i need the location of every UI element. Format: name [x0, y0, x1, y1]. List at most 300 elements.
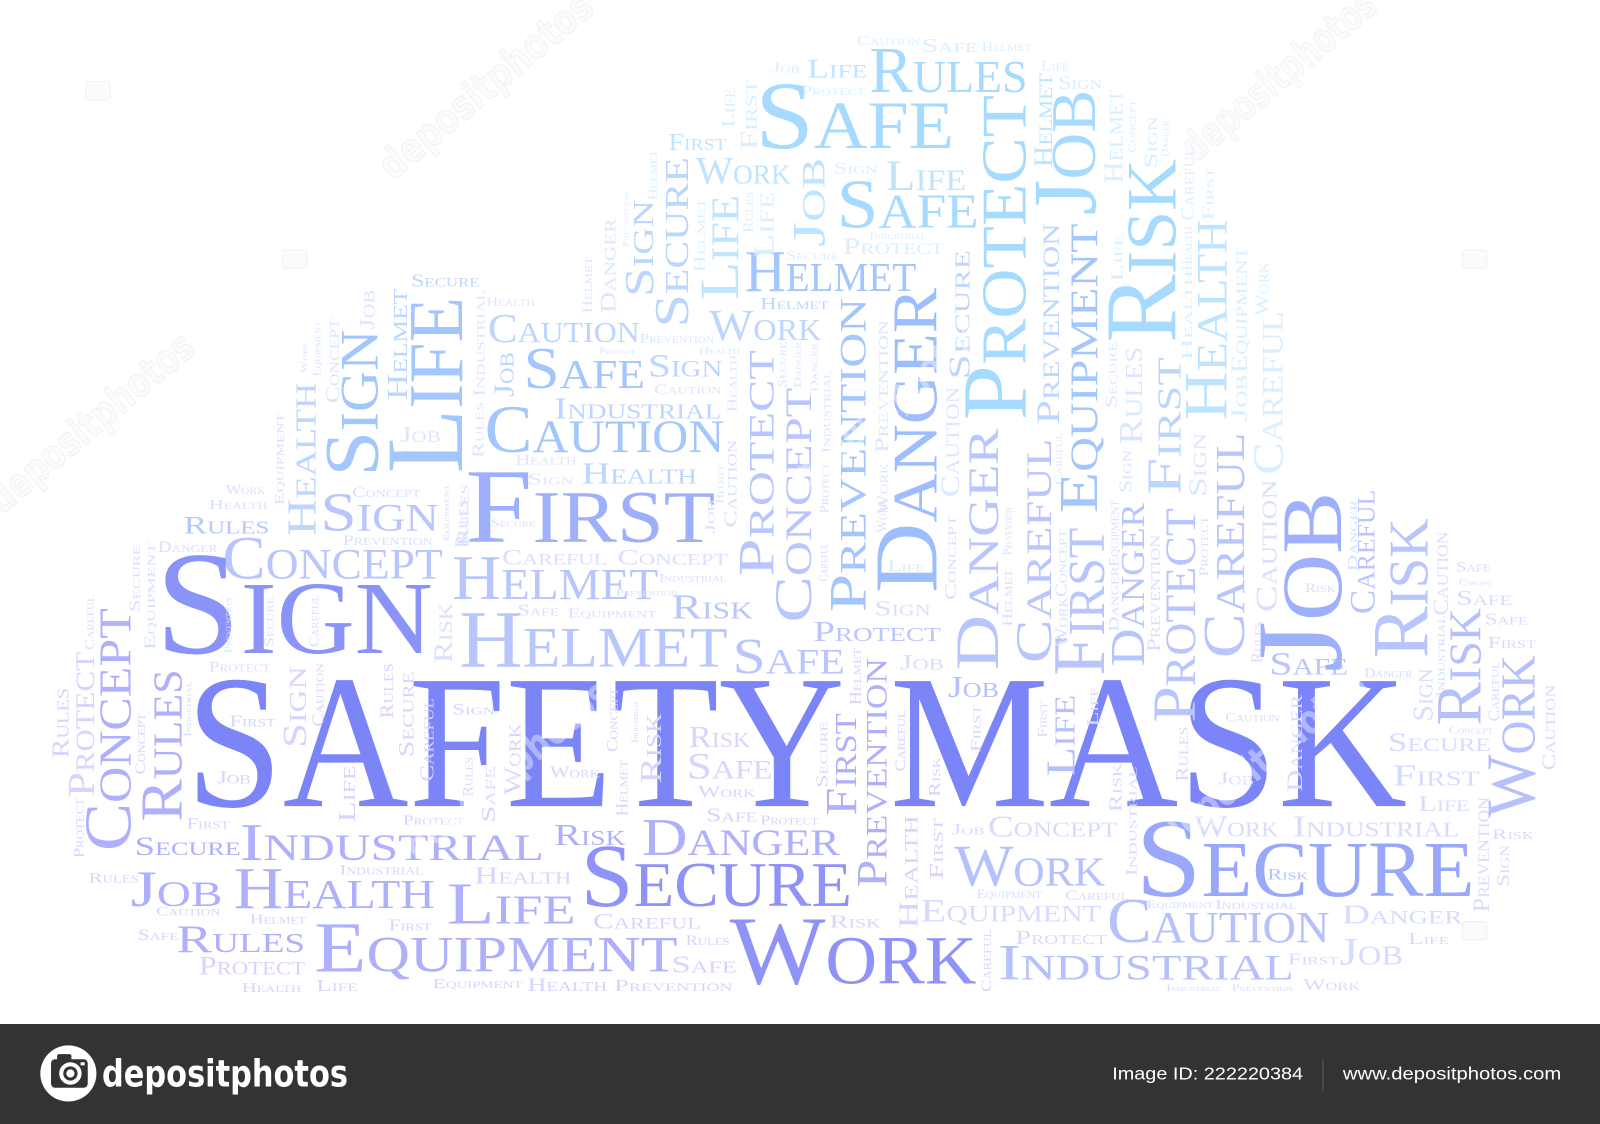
vertical keywords: left side: Job [702, 500, 717, 534]
bottom horizontal keywords: First [187, 816, 230, 833]
vertical keywords: left side: Concept [322, 318, 344, 403]
lower middle horizontal keywords: Safe [1485, 610, 1528, 629]
logo wordmark: depositphotos [102, 1052, 348, 1096]
bottom horizontal keywords: Health [242, 980, 302, 995]
top lobe horizontal keywords: Helmet [745, 238, 916, 304]
vertical keywords: lower right: Careful [1486, 661, 1503, 721]
vertical keywords: left side: Caution [308, 663, 327, 727]
bottom right horizontal keywords: First [1393, 759, 1480, 793]
bottom right horizontal keywords: Risk [1267, 867, 1308, 884]
lower middle horizontal keywords: Safe [1456, 586, 1512, 610]
vertical keywords: left side: Rules [460, 757, 476, 797]
upper middle horizontal keywords: Health [515, 452, 577, 468]
bottom horizontal keywords: Risk [830, 912, 882, 932]
vertical keywords: upper right: Health [1173, 219, 1241, 420]
bottom horizontal keywords: Caution [156, 904, 221, 918]
vertical keywords: upper centre: Danger [793, 341, 804, 388]
lower middle horizontal keywords [155, 522, 1537, 789]
vertical keywords: upper centre: Rules [741, 192, 757, 233]
vertical keywords: lower right: Prevention [1000, 507, 1015, 555]
vertical keywords: lower right: First [1035, 701, 1050, 738]
vertical keywords: lower right: Work [1051, 596, 1071, 647]
vertical keywords: upper centre: Danger [858, 288, 957, 593]
vertical keywords: upper centre: Life [749, 192, 780, 258]
bottom right horizontal keywords: Work [1303, 975, 1361, 994]
vertical keywords: left side: Helmet [613, 760, 632, 816]
bottom horizontal keywords: Prevention [614, 976, 733, 995]
bottom right horizontal keywords: Work [1194, 810, 1279, 844]
top lobe horizontal keywords: Caution [857, 33, 921, 48]
bottom right horizontal keywords: Protect [1015, 927, 1108, 949]
vertical keywords: upper centre: Protect [818, 463, 832, 513]
vertical keywords: left side: Industrial [630, 700, 640, 743]
vertical keywords: upper right: Risk [1086, 159, 1199, 343]
vertical keywords: upper centre: Job [354, 290, 379, 330]
bottom horizontal keywords: Danger [642, 809, 840, 867]
vertical keywords: upper centre: Protect [729, 350, 785, 577]
bottom right horizontal keywords: Industrial [998, 936, 1294, 992]
vertical keywords: upper centre [309, 79, 1046, 622]
vertical keywords: upper right: Equipment [1048, 223, 1109, 513]
lower middle horizontal keywords: Safe [1269, 646, 1348, 682]
vertical keywords: lower right: Careful [893, 710, 909, 771]
vertical keywords: lower right: Industrial [1124, 766, 1141, 877]
upper middle horizontal keywords: Caution [488, 306, 640, 351]
vertical keywords: upper right: Sign [1183, 433, 1212, 497]
lower middle horizontal keywords: Concept [617, 544, 728, 569]
vertical keywords: upper right: Health [1179, 226, 1196, 270]
vertical keywords: left side: Equipment [312, 321, 323, 377]
vertical keywords: upper right: Job [1227, 374, 1253, 421]
top lobe horizontal keywords: Sign [1058, 73, 1102, 94]
top lobe horizontal keywords: Protect [801, 83, 866, 98]
vertical keywords: lower right: Danger [1282, 694, 1307, 792]
bottom horizontal keywords: Health [528, 975, 607, 996]
vertical keywords: left side: Rules [129, 669, 195, 821]
upper middle horizontal keywords: Danger [158, 539, 218, 556]
upper middle horizontal keywords: Health [487, 295, 535, 309]
vertical keywords: left side: Careful [417, 698, 439, 782]
upper middle horizontal keywords: Health [209, 497, 268, 512]
icon: depositphotos camera logo [40, 1045, 96, 1102]
vertical keywords: lower right [813, 433, 1560, 992]
upper middle horizontal keywords: Rules [184, 511, 269, 540]
upper middle horizontal keywords: Prevention [343, 533, 433, 549]
vertical keywords: upper right: Careful [1178, 147, 1199, 220]
vertical keywords: left side: Work [299, 341, 309, 373]
vertical keywords: left side: Industrial [183, 681, 193, 737]
vertical keywords: left side: Protect [72, 798, 88, 858]
top lobe horizontal keywords: Helmet [982, 40, 1032, 54]
vertical keywords: lower right: Danger [1100, 503, 1155, 666]
vertical keywords: lower right: Life [1083, 686, 1102, 727]
bottom right horizontal keywords: Risk [1492, 827, 1535, 843]
vertical keywords: upper centre: Life [689, 195, 750, 300]
top lobe horizontal keywords: Secure [786, 248, 839, 263]
lower middle horizontal keywords: Careful [502, 544, 607, 569]
vertical keywords: upper right: Life [1107, 234, 1126, 282]
lower middle horizontal keywords: First [1488, 633, 1537, 652]
vertical keywords: upper centre: Danger [809, 342, 820, 392]
bottom right horizontal keywords: Job [952, 822, 985, 839]
top lobe horizontal keywords: Safe [837, 167, 979, 244]
bottom horizontal keywords: Work [698, 782, 756, 801]
vertical keywords: lower right: Caution [1250, 480, 1284, 612]
vertical keywords: upper centre: Industrial [820, 370, 834, 453]
vertical keywords: left side: Risk [428, 603, 458, 663]
watermark overlays across the words: depositphotos [394, 669, 620, 870]
lower middle horizontal keywords: Protect [813, 617, 941, 648]
vertical keywords: upper centre: Protect [944, 95, 1046, 420]
vertical keywords: left side: Equipment [142, 542, 159, 650]
vertical keywords: lower right: Risk [1358, 518, 1446, 658]
bottom horizontal keywords: First [230, 712, 276, 731]
lower middle horizontal keywords: Concept [1459, 578, 1492, 588]
bottom right horizontal keywords: Industrial [1166, 983, 1222, 993]
top lobe horizontal keywords: Safe [921, 35, 978, 57]
vertical keywords: upper right: Helmet [1097, 89, 1128, 184]
vertical keywords: left side: Concept [133, 713, 149, 774]
bottom horizontal keywords: Job [217, 768, 251, 788]
title: SAFETY MASK: SAFETY [186, 637, 845, 848]
vertical keywords: left side: Work [499, 723, 526, 795]
upper middle horizontal keywords: Sign [528, 470, 574, 489]
vertical keywords: upper right: Equipment [1227, 247, 1253, 373]
vertical keywords: lower right: Job [1233, 492, 1368, 672]
vertical keywords: upper centre: Job [489, 352, 520, 397]
vertical keywords: lower right: Life [1038, 695, 1083, 777]
lower middle horizontal keywords: Sign [155, 522, 433, 686]
title: SAFETY MASK [186, 637, 1407, 848]
bottom horizontal keywords: Risk [689, 720, 750, 754]
lower middle horizontal keywords: Life [888, 556, 925, 575]
bottom right horizontal keywords: Equipment [1147, 899, 1213, 911]
vertical keywords: upper right [944, 73, 1293, 670]
lower middle horizontal keywords: Concept [222, 525, 443, 593]
vertical keywords: left side: Health [725, 354, 740, 412]
vertical keywords: upper centre: Helmet [692, 198, 709, 272]
vertical keywords: lower right: Protect [1141, 508, 1209, 722]
bottom right horizontal keywords: Secure [1388, 727, 1491, 757]
bottom right horizontal keywords: Equipment [977, 887, 1042, 901]
vertical keywords: upper right: First [1198, 167, 1217, 220]
upper middle horizontal keywords: Concept [352, 485, 420, 501]
bottom right horizontal keywords: Life [1418, 791, 1469, 816]
bottom horizontal keywords: First [389, 916, 432, 935]
bottom right horizontal keywords: Danger [1342, 898, 1463, 929]
bottom horizontal keywords: Life [316, 976, 358, 995]
top lobe horizontal keywords [668, 33, 1102, 304]
vertical keywords: lower right: Secure [813, 721, 832, 788]
top lobe horizontal keywords: Safe [755, 62, 954, 169]
top lobe horizontal keywords: Industrial [869, 231, 927, 242]
bottom horizontal keywords: Protect [760, 813, 819, 828]
bottom horizontal keywords [89, 701, 977, 1006]
lower middle horizontal keywords: Industrial [659, 573, 727, 585]
upper middle horizontal keywords [158, 271, 829, 565]
vertical keywords: upper right: First [1137, 357, 1192, 495]
vertical keywords: left side: Sign [277, 666, 314, 748]
vertical keywords: upper right: Careful [1246, 311, 1293, 474]
vertical keywords: upper right: Danger [944, 428, 1012, 670]
lower middle horizontal keywords: Risk [1305, 581, 1336, 595]
lower middle horizontal keywords: Helmet [459, 593, 728, 684]
bottom horizontal keywords: Rules [177, 918, 305, 961]
vertical keywords: left side: Equipment [273, 412, 287, 505]
bottom right horizontal keywords: Secure [1136, 797, 1474, 921]
bottom horizontal keywords: Secure [581, 827, 852, 926]
faint background watermarks [0, 0, 1487, 940]
vertical keywords: left side: Rules [377, 663, 398, 718]
upper middle horizontal keywords: First [465, 447, 715, 565]
bottom right horizontal keywords: Caution [1107, 886, 1330, 956]
lower middle horizontal keywords: Sign [874, 595, 931, 620]
vertical keywords: upper right: Careful [1053, 433, 1065, 485]
bottom right horizontal keywords: Equipment [920, 893, 1101, 929]
vertical keywords: left side: Safe [478, 766, 500, 822]
vertical keywords: upper centre: Sign [617, 200, 662, 297]
lower middle horizontal keywords: Prevention [616, 588, 678, 599]
bottom horizontal keywords: Equipment [433, 976, 523, 991]
vertical keywords: upper right: Careful [1007, 439, 1063, 663]
vertical keywords: upper right: Work [1251, 262, 1273, 315]
top lobe horizontal keywords: First [668, 129, 727, 156]
vertical keywords: left side: Secure [127, 545, 144, 612]
vertical keywords: upper centre: Caution [935, 386, 965, 497]
bottom horizontal keywords: Helmet [250, 911, 307, 926]
upper middle horizontal keywords: Caution [485, 392, 724, 467]
vertical keywords: lower right: First [969, 705, 985, 752]
vertical keywords: lower right: Danger [1106, 566, 1122, 632]
vertical keywords: left side: Rules [451, 500, 471, 548]
top lobe horizontal keywords: Job [772, 59, 800, 76]
bottom horizontal keywords: Health [474, 863, 571, 890]
top lobe horizontal keywords: Rules [869, 35, 1028, 107]
vertical keywords: upper centre: Life [719, 88, 740, 128]
vertical keywords: upper right: Sign [1116, 449, 1136, 493]
bottom horizontal keywords: Work [550, 763, 600, 782]
vertical keywords: lower right: Prevention [850, 658, 897, 888]
bottom horizontal keywords: Secure [135, 831, 241, 861]
vertical keywords: left side [47, 318, 741, 858]
bottom horizontal keywords: Careful [593, 909, 701, 934]
upper middle horizontal keywords: Safe [523, 335, 645, 401]
lower middle horizontal keywords: Caution [1226, 710, 1280, 724]
bottom horizontal keywords: Job [131, 862, 222, 918]
vertical keywords: left side: Risk [634, 713, 668, 784]
vertical keywords: lower right: Risk [1424, 608, 1495, 726]
vertical keywords: left side: Secure [393, 671, 418, 757]
upper middle horizontal keywords: Sign [320, 482, 439, 543]
vertical keywords: upper centre: Concept [765, 388, 823, 622]
top lobe horizontal keywords: Work [696, 150, 791, 193]
vertical keywords: upper centre: Helmet [580, 257, 596, 313]
vertical keywords: left side: Careful [306, 595, 321, 647]
lower middle horizontal keywords: Risk [671, 587, 754, 626]
vertical keywords: upper centre: Rules [469, 402, 488, 458]
vertical keywords: left side: Concept [604, 687, 621, 752]
bottom right horizontal keywords: Work [954, 833, 1106, 899]
upper middle horizontal keywords: Prevention [640, 331, 715, 346]
vertical keywords: upper centre: Secure [776, 341, 790, 388]
bottom right horizontal keywords: Job [1340, 930, 1403, 973]
vertical keywords: left side: Rules [453, 485, 472, 546]
vertical keywords: lower right: Industrial [1434, 615, 1448, 697]
lower middle horizontal keywords: Safe [517, 600, 560, 619]
vertical keywords: lower right: Sign [1493, 844, 1513, 887]
bottom horizontal keywords: Industrial [340, 863, 423, 879]
vertical keywords: left side: Helmet [715, 464, 726, 503]
vertical keywords: upper centre: Prevention [622, 191, 631, 247]
vertical keywords: lower right: Health [892, 815, 923, 929]
bottom horizontal keywords: Safe [138, 927, 179, 944]
vertical keywords: lower right: Risk [1105, 762, 1125, 812]
bottom right horizontal keywords: Prevention [1232, 983, 1294, 993]
image ID: Image ID: 222220384 [1112, 1064, 1303, 1084]
bottom right horizontal keywords: Careful [1065, 888, 1129, 904]
vertical keywords: lower right: Risk [925, 757, 944, 797]
bottom horizontal keywords: Equipment [314, 906, 678, 987]
upper middle horizontal keywords: Protect [599, 346, 635, 356]
vertical keywords: lower right: Danger [1345, 500, 1360, 571]
vertical keywords: lower right: Helmet [1000, 569, 1016, 627]
bottom horizontal keywords: Safe [706, 804, 757, 826]
lower middle horizontal keywords: Helmet [452, 543, 658, 613]
footer bar [0, 1024, 1600, 1124]
upper middle horizontal keywords: Health [582, 457, 697, 491]
vertical keywords: upper right: Rules [1113, 347, 1150, 445]
top lobe horizontal keywords: Protect [843, 234, 944, 260]
vertical keywords: lower right: Work [1474, 655, 1551, 817]
vertical keywords: upper right: Danger [1160, 120, 1171, 157]
vertical keywords: left side: Caution [721, 439, 741, 528]
vertical keywords: upper centre: Prevention [872, 320, 893, 453]
vertical keywords: left side: Life [334, 765, 361, 822]
vertical keywords: lower right: First [816, 713, 866, 815]
watermark overlays across the words: depositphotos [1149, 659, 1375, 860]
vertical keywords: lower right: Sign [1409, 668, 1440, 721]
vertical keywords: lower right: Careful [1342, 490, 1382, 614]
vertical keywords: upper centre: Helmet [383, 289, 414, 400]
lower middle horizontal keywords: Job [900, 649, 944, 674]
lower middle horizontal keywords: Danger [1364, 666, 1412, 681]
bottom horizontal keywords: Safe [671, 951, 737, 978]
vertical keywords: lower right: First [926, 818, 948, 880]
upper middle horizontal keywords: Health [699, 346, 740, 357]
vertical keywords: lower right: Prevention [1469, 796, 1495, 912]
vertical keywords: upper right: Sign [1141, 116, 1162, 168]
bottom horizontal keywords: Sign [452, 701, 495, 718]
vertical keywords: upper right: Helmet [1028, 73, 1058, 167]
top lobe horizontal keywords: Life [1041, 58, 1069, 74]
vertical keywords: lower right: Equipment [1106, 500, 1122, 566]
upper middle horizontal keywords: Sign [648, 349, 723, 385]
lower middle horizontal keywords: Job [1218, 769, 1255, 789]
vertical keywords: lower right: Careful [1191, 433, 1257, 658]
vertical keywords: upper centre: Industrial [470, 290, 489, 397]
vertical keywords: upper centre: First [736, 79, 763, 150]
upper middle horizontal keywords: Industrial [554, 391, 721, 425]
vertical keywords: upper right: Concept [1127, 100, 1139, 153]
vertical keywords: lower right: Caution [1539, 685, 1560, 770]
vertical keywords: upper centre: Concept [941, 514, 960, 600]
bottom right horizontal keywords: Concept [988, 810, 1118, 844]
bottom right horizontal keywords: First [1288, 949, 1340, 968]
vertical keywords: left side: Careful [82, 595, 97, 650]
bottom right horizontal keywords: Industrial [1293, 810, 1459, 844]
vertical keywords: lower right: Rules [1249, 621, 1266, 663]
lower middle horizontal keywords: Job [948, 670, 999, 704]
upper middle horizontal keywords: Work [709, 300, 822, 350]
upper middle horizontal keywords: Secure [491, 519, 536, 530]
vertical keywords: upper centre: Helmet [646, 149, 660, 200]
vertical keywords: left side: Protect [61, 652, 103, 797]
lower middle horizontal keywords: Safe [1456, 559, 1491, 575]
vertical keywords: left side: Concept [73, 608, 146, 851]
bottom horizontal keywords: Industrial [240, 814, 544, 872]
top lobe horizontal keywords: Life [807, 54, 867, 84]
vertical keywords: upper centre: Life [364, 297, 486, 473]
vertical keywords: upper right: Job [1016, 90, 1115, 215]
vertical keywords: left side: Prevention [224, 597, 235, 653]
bottom right horizontal keywords: Concept [1449, 726, 1494, 737]
vertical keywords: upper centre: Danger [595, 218, 620, 313]
vertical keywords: left side: Secure [261, 596, 276, 647]
vertical keywords: left side: Rules [47, 688, 74, 758]
vertical keywords: upper centre: Secure [644, 157, 699, 328]
vertical keywords: upper right: Prevention [1031, 223, 1067, 424]
bottom right horizontal keywords [920, 726, 1535, 994]
lower middle horizontal keywords: Equipment [567, 605, 657, 620]
vertical keywords: upper centre: Secure [942, 250, 976, 380]
upper middle horizontal keywords: Job [400, 422, 441, 447]
bottom right horizontal keywords: Industrial [1215, 897, 1297, 912]
vertical keywords: upper centre: Work [873, 463, 892, 514]
top lobe horizontal keywords: Sign [834, 158, 878, 177]
vertical keywords: upper centre: Work [875, 499, 891, 533]
upper middle horizontal keywords: Work [226, 482, 266, 497]
vertical keywords: upper centre: Sign [309, 330, 395, 477]
vertical keywords: upper right: Secure [1101, 341, 1120, 408]
vertical keywords: upper right: Health [1179, 270, 1196, 360]
vertical keywords: upper centre: Job [783, 158, 835, 247]
title: SAFETY MASK: MASK [890, 637, 1407, 848]
bottom horizontal keywords: Life [447, 870, 576, 936]
vertical keywords: lower right: Rules [1172, 727, 1192, 782]
lower middle horizontal keywords: Protect [209, 659, 270, 675]
vertical keywords: left side: Equipment [442, 484, 451, 541]
lower middle horizontal keywords: Safe [733, 629, 845, 685]
upper middle horizontal keywords: Secure [411, 271, 480, 291]
vertical keywords: lower right: Prevention [1144, 535, 1165, 652]
upper middle horizontal keywords: Caution [654, 382, 721, 398]
upper middle horizontal keywords: Secure [400, 448, 456, 464]
watermark overlays across the words [394, 310, 1375, 870]
upper middle horizontal keywords: Helmet [760, 294, 829, 313]
bottom horizontal keywords: Rules [686, 933, 730, 949]
bottom right horizontal keywords: Life [1408, 929, 1449, 948]
vertical keywords: lower right: Concept [1051, 529, 1070, 597]
vertical keywords: lower right: Caution [1428, 531, 1453, 615]
top lobe horizontal keywords: Life [886, 153, 966, 200]
vertical keywords: lower right: Helmet [846, 648, 865, 705]
bottom horizontal keywords: Protect [199, 951, 306, 981]
vertical keywords: left side: Health [279, 383, 324, 536]
bottom horizontal keywords: Rules [89, 871, 139, 887]
vertical keywords: lower right: Protect [1197, 516, 1211, 577]
vertical keywords: upper centre: Prevention [819, 298, 877, 612]
website URL: www.depositphotos.com [1342, 1064, 1561, 1084]
